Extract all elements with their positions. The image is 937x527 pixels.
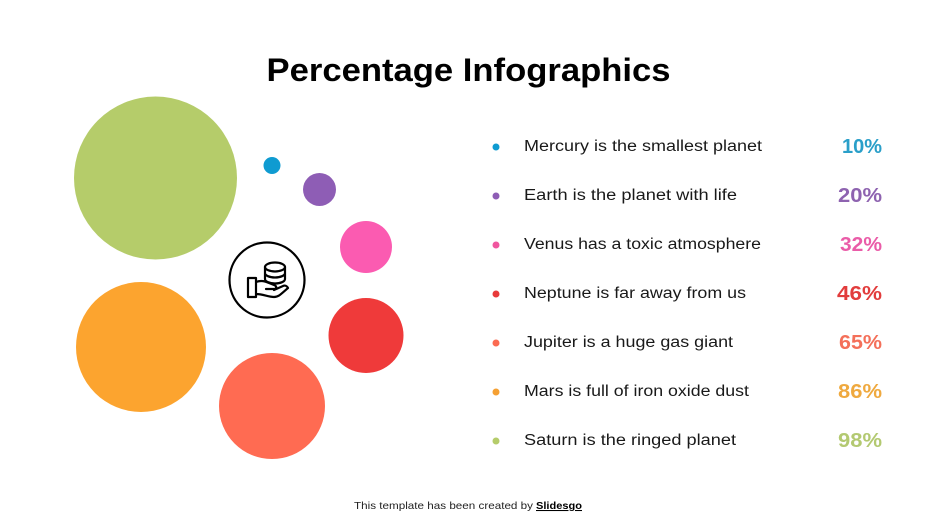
row: Saturn: Saturn is the ringed planet [524, 432, 737, 449]
footer credit: Slidesgo [536, 500, 582, 512]
icon: hand holding coins [230, 242, 304, 318]
row: Venus: Venus has a toxic atmosphere [524, 236, 761, 253]
row: Venus [492, 234, 882, 256]
bubble chart [74, 96, 404, 459]
row: Mars: 86% [838, 381, 882, 403]
row: Jupiter: 65% [839, 332, 882, 354]
footer credit: This template has been created by [354, 500, 534, 512]
bubble: Earth 20% [303, 173, 336, 206]
row: Earth: 20% [838, 185, 882, 207]
bubble: Venus 32% [340, 221, 392, 273]
bubble: Mars 86% [76, 282, 206, 412]
row: Earth [492, 185, 882, 207]
row: Saturn: 98% [838, 430, 882, 452]
row: Mercury: 10% [842, 136, 882, 158]
row: Earth: Earth is the planet with life [524, 187, 737, 204]
row: Jupiter [492, 332, 882, 354]
row: Neptune: 46% [837, 283, 882, 305]
bubble: Neptune 46% [328, 298, 404, 373]
title: Percentage Infographics [266, 52, 670, 88]
bubble: Mercury 10% [264, 157, 280, 174]
bubble: Saturn 98% [74, 96, 237, 260]
row: Jupiter: Jupiter is a huge gas giant [524, 334, 734, 351]
row: Neptune [492, 283, 882, 305]
row: Mercury [492, 136, 882, 158]
row: Mars [492, 381, 882, 403]
row: Saturn [492, 430, 882, 452]
bubble: Jupiter 65% [219, 353, 325, 459]
row: Mars: Mars is full of iron oxide dust [524, 383, 750, 400]
row: Venus: 32% [840, 234, 882, 256]
row: Neptune: Neptune is far away from us [524, 285, 746, 302]
row: Mercury: Mercury is the smallest planet [524, 138, 763, 155]
